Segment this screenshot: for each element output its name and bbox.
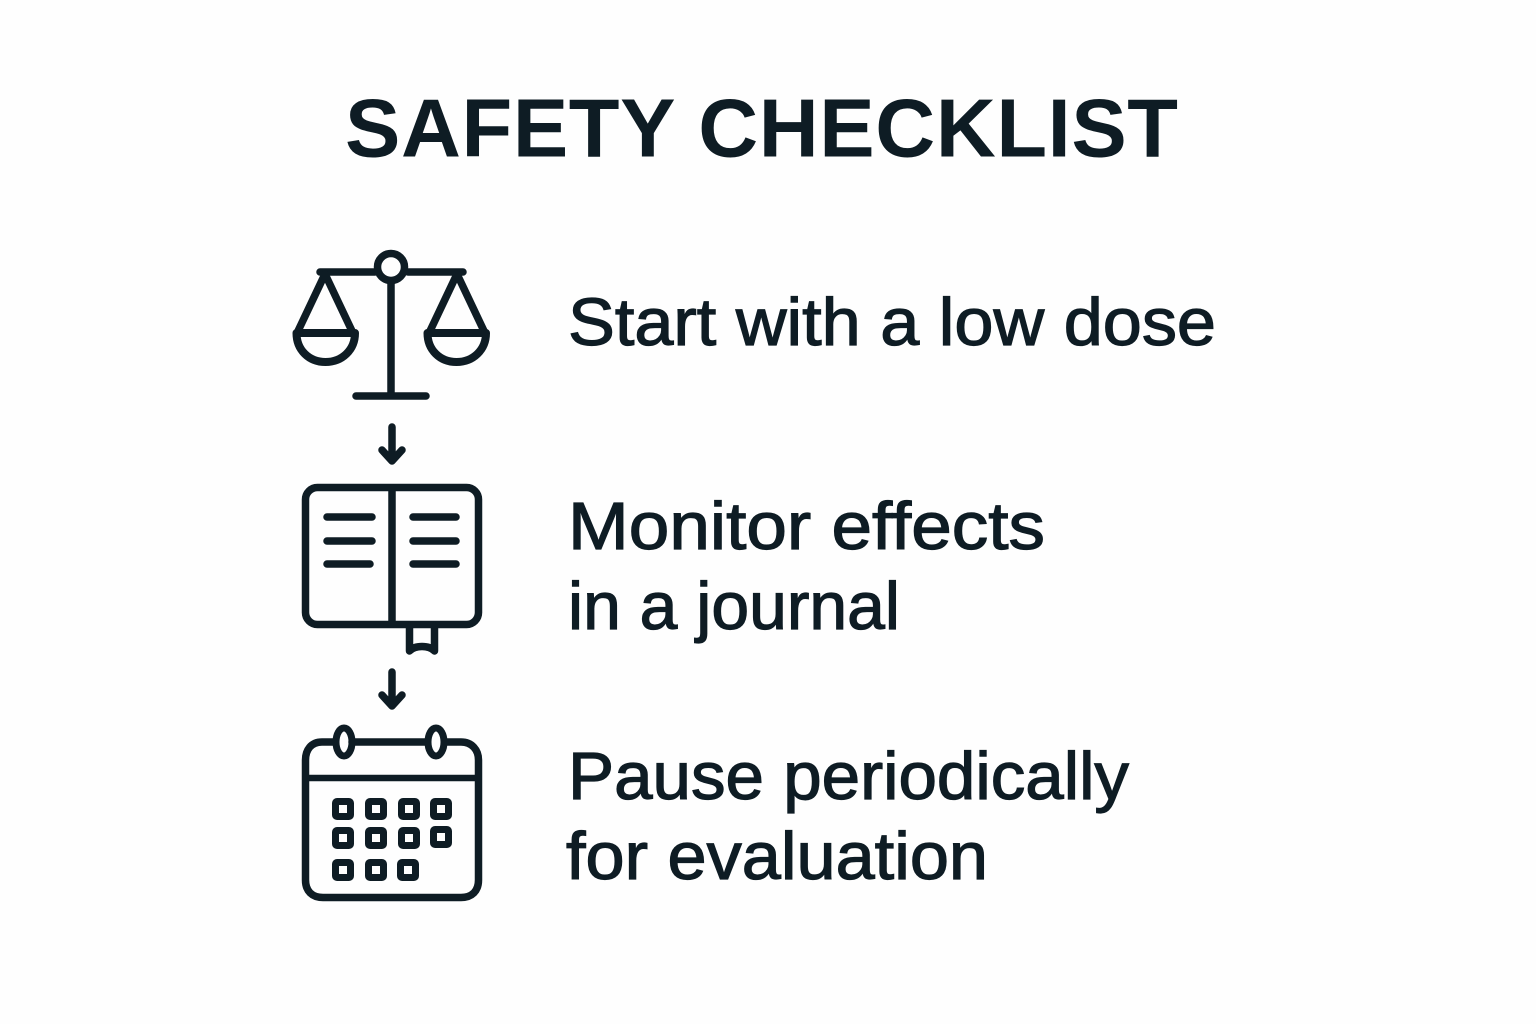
text: start with a low dose: Start with a low dose: [568, 285, 1216, 360]
text: monitor effects in a journal: [568, 489, 1045, 644]
arrow: scale to journal: [382, 427, 402, 461]
text: monitor effects in a journal: Monitor effects: [568, 489, 1045, 564]
title: SAFETY CHECKLIST: [345, 82, 1178, 174]
arrow: journal to calendar: [382, 672, 402, 706]
icon: calendar: [306, 728, 478, 898]
text: pause periodically for evaluation: Pause periodically: [568, 739, 1130, 814]
text: monitor effects in a journal: in a journal: [568, 569, 900, 644]
icon: balance scale: [296, 254, 486, 396]
icon: open journal: [306, 488, 478, 651]
text: pause periodically for evaluation: [566, 739, 1130, 894]
text: pause periodically for evaluation: for evaluation: [566, 819, 988, 894]
